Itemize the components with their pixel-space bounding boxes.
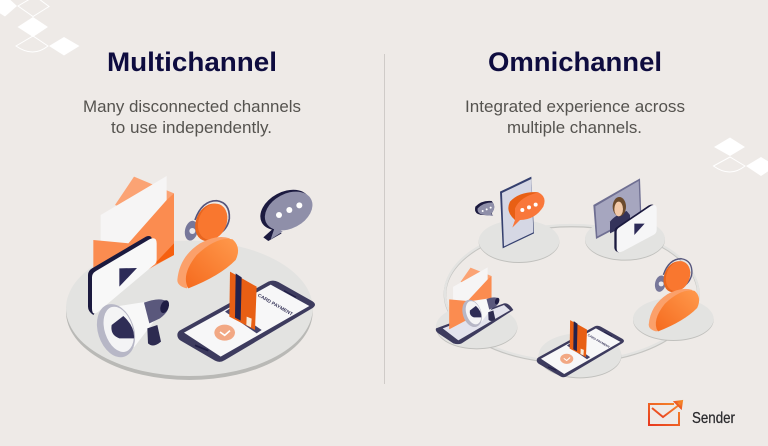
heading: Multichannel: Multichannel bbox=[107, 47, 277, 77]
platform: agent bbox=[633, 298, 714, 341]
connecting ring bbox=[445, 225, 698, 363]
icon: envelope bbox=[93, 176, 174, 300]
platform: payment bbox=[539, 333, 621, 378]
icon: support agent bbox=[649, 257, 699, 332]
platform: chat bbox=[479, 220, 559, 263]
decoration: right diamonds bbox=[714, 138, 768, 176]
icon: small speech bubble bbox=[475, 201, 494, 216]
label: card payment: CARD PAYMENT bbox=[257, 293, 294, 317]
text: multichannel description bbox=[83, 98, 301, 137]
illustration: multichannel platform with icons bbox=[66, 176, 319, 380]
icon: phone with card payment bbox=[537, 320, 624, 377]
icon: video play card bbox=[614, 204, 657, 252]
icon: phone with email and megaphone bbox=[436, 267, 513, 344]
icon: video play card bbox=[88, 236, 157, 315]
text: multichannel description: to use independently. bbox=[111, 119, 272, 137]
logo mark bbox=[649, 401, 682, 425]
icon: support agent bbox=[177, 199, 238, 288]
icon: phone with card payment bbox=[177, 272, 315, 362]
divider bbox=[384, 54, 386, 384]
platform: video bbox=[585, 218, 665, 261]
logo: Sender bbox=[649, 401, 736, 427]
heading: Omnichannel: Omnichannel bbox=[488, 47, 662, 77]
platform: email bbox=[436, 305, 517, 349]
illustration: omnichannel ring with icons bbox=[436, 177, 714, 378]
icon: phone with chat bubble bbox=[500, 177, 545, 248]
icon: megaphone bbox=[90, 299, 171, 362]
text: omnichannel description bbox=[465, 98, 685, 137]
icon: speech bubble bbox=[253, 182, 319, 241]
text: omnichannel description: multiple channels. bbox=[507, 119, 642, 137]
decoration: top-left diamonds bbox=[0, 0, 80, 56]
text: omnichannel description: Integrated experience across bbox=[465, 98, 685, 116]
logo wordmark: Sender bbox=[692, 410, 736, 427]
icon: video call screen bbox=[593, 178, 641, 239]
platform bbox=[66, 241, 313, 380]
label: card payment: CARD PAYMENT bbox=[587, 333, 611, 349]
text: multichannel description: Many disconnected channels bbox=[83, 98, 301, 116]
